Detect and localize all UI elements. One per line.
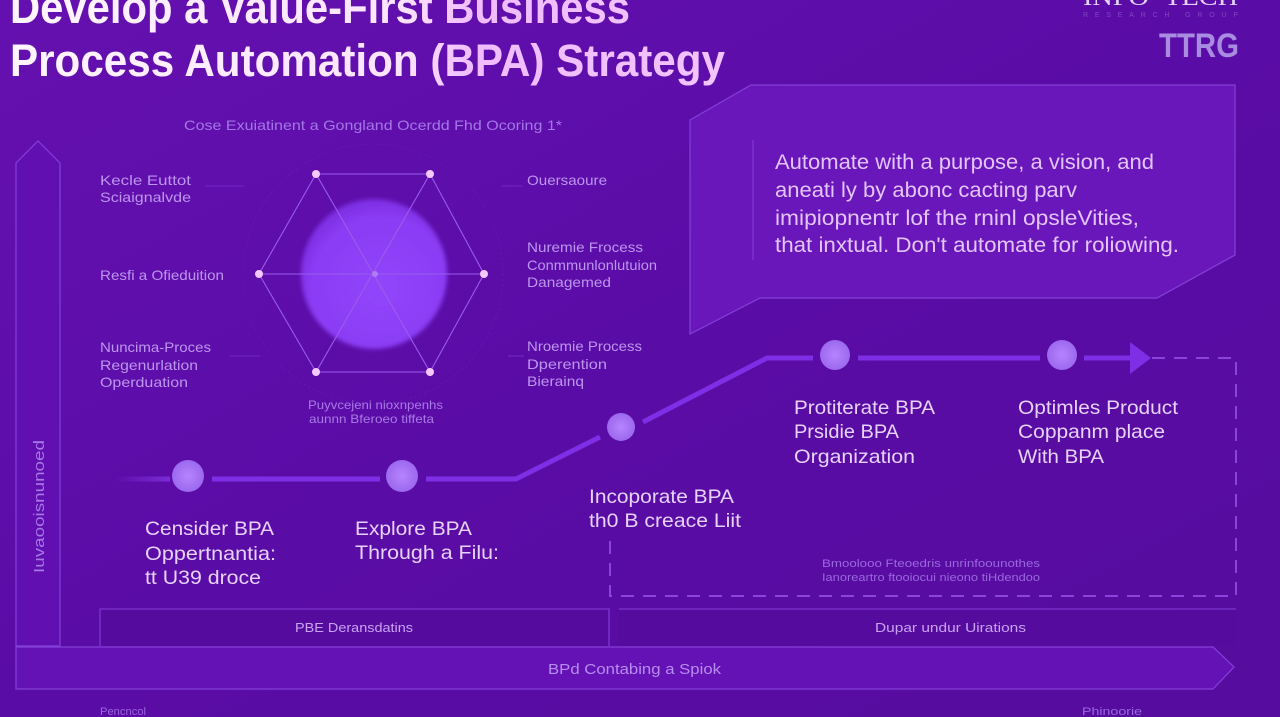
milestone 2 label: Through a Filu: [355, 542, 499, 564]
milestone 3 label: Incoporate BPA [589, 486, 734, 508]
milestone 3 label: th0 B creace Liit [589, 510, 742, 532]
callout text [775, 150, 1179, 257]
phase box: left [100, 609, 609, 646]
milestone 2 label [355, 518, 499, 564]
hexagon caption: aunnn Bferoeo tiffeta [309, 412, 434, 426]
right label: Nuremie Process: Nuremie Frocess [527, 239, 643, 255]
right label: Nuremie Process: Danagemed [527, 274, 611, 290]
hexagon caption [308, 398, 443, 426]
horizontal axis arrow [16, 647, 1234, 689]
milestone 1 label: tt U39 droce [145, 567, 261, 589]
phase box: left: PBE Deransdatins [295, 621, 413, 635]
left label: Kecle Euttot: Sciaignalvde [100, 189, 191, 205]
callout text: that inxtual. Don't automate for roliowing. [775, 233, 1179, 257]
milestone 5 label: With BPA [1018, 446, 1104, 468]
left label: Nuncima-Proces [100, 339, 211, 390]
title [10, 0, 725, 86]
arrowhead [1130, 342, 1151, 374]
milestone 4 label: Prsidie BPA [794, 421, 899, 443]
vertical axis arrow [16, 141, 60, 646]
right label: Nuremie Process: Conmmunlonlutuion [527, 257, 657, 273]
milestone 1 label: Censider BPA [145, 518, 274, 540]
milestone 5 node [1047, 340, 1077, 370]
milestone 2 label: Explore BPA [355, 518, 472, 540]
glowing central orb [301, 199, 447, 349]
callout text: aneati ly by abonc cacting parv [775, 178, 1077, 202]
left label: Nuncima-Proces: Operduation [100, 374, 188, 390]
milestone 4 label [794, 397, 935, 468]
callout [690, 85, 1235, 334]
milestone 1 label [145, 518, 276, 589]
hexagon nodes [255, 170, 488, 376]
title: Process Automation (BPA) Strategy [10, 35, 725, 86]
milestone 5 label: Optimles Product [1018, 397, 1179, 419]
dashed region caption [822, 558, 1041, 584]
milestone 2 node [386, 460, 418, 492]
panel: hexagon framework [100, 117, 657, 426]
dashed future region [610, 358, 1236, 596]
roadmap line [115, 358, 1132, 479]
phase box: right [619, 609, 1236, 646]
milestone 1 node [172, 460, 204, 492]
right label: Ouersaoure: Ouersaoure [527, 172, 607, 188]
right label: Nroemie Process: Dperention [527, 356, 607, 372]
milestone 5 label [1018, 397, 1179, 468]
milestone 3 node [607, 413, 635, 441]
hexagon network [243, 144, 503, 404]
logo: Info-Tech and TTRG [1083, 0, 1239, 65]
milestone 4 label: Organization [794, 446, 915, 468]
milestone 3 label [589, 486, 742, 532]
callout text: Automate with a purpose, a vision, and [775, 150, 1154, 174]
horizontal axis label: BPd Contabing a Spiok [548, 662, 722, 678]
left label: Resfi Ofieduitior: Resfi a Ofieduition [100, 267, 224, 283]
framework heading: Cose Exuiatinent a Gongland Ocerdd Fhd Ocoring 1* [184, 117, 563, 133]
left label: Kecle Euttot: Kecle Euttot [100, 172, 191, 188]
left label: Nuncima-Proces: Nuncima-Proces [100, 339, 211, 355]
vertical axis label: Iuvaooisnunoed [31, 440, 48, 573]
milestone 4 label: Protiterate BPA [794, 397, 935, 419]
milestone 1 label: Oppertnantia: [145, 543, 276, 565]
phase box: right: Dupar undur Uirations [875, 621, 1026, 635]
right label: Nroemie Process: Bierainq [527, 373, 584, 389]
right label: Nroemie Process [527, 338, 642, 389]
dashed region caption: Ianoreartro ftooiocui nieono tiHdendoo [822, 572, 1040, 584]
left label: Nuncima-Proces: Regenurlation [100, 357, 198, 373]
milestone 4 node [820, 340, 850, 370]
milestone 5 label: Coppanm place [1018, 421, 1165, 443]
right label: Nuremie Process [527, 239, 657, 290]
logo: Info-Tech and TTRG: TTRG [1159, 27, 1239, 65]
right label: Nroemie Process: Nroemie Process [527, 338, 642, 354]
dashed region caption: Bmoolooo Fteoedris unrinfoounothes [822, 558, 1041, 570]
callout text: imipiopnentr lof the rninl opsleVities, [775, 206, 1139, 230]
logo: Info-Tech and TTRG: RESEARCH GROUP [1083, 12, 1238, 19]
hexagon caption: Puyvcejeni nioxnpenhs [308, 398, 443, 412]
left label: Kecle Euttot [100, 172, 191, 205]
